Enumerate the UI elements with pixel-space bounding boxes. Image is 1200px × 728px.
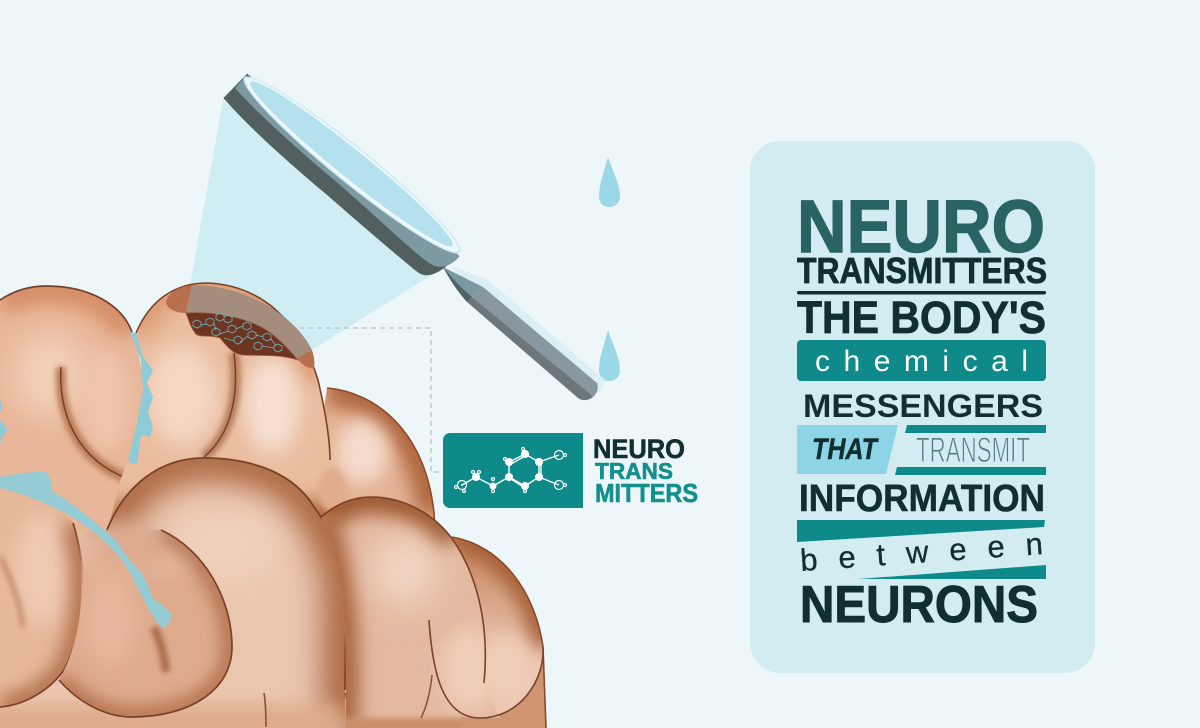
blue fluid band	[0, 471, 171, 627]
that block	[797, 425, 898, 474]
panel background	[750, 141, 1095, 673]
upper wedge	[797, 520, 1045, 542]
blue fluid drip between upper lobes	[0, 332, 153, 464]
lower middle lobe	[58, 529, 233, 718]
far right lobe	[452, 536, 547, 728]
lower wedge	[858, 565, 1046, 579]
translucent lens overlay	[186, 285, 312, 358]
dark tissue patch	[186, 313, 298, 360]
transmit block	[895, 425, 1046, 475]
panel: neurotransmitters definition	[750, 141, 1095, 673]
teal badge	[443, 433, 583, 508]
lower left lobe	[0, 511, 84, 708]
magnifying glass	[215, 62, 605, 400]
lens and rim	[215, 62, 473, 286]
logo wordmark: TRANS	[595, 458, 673, 484]
right middle lobe	[320, 490, 550, 728]
transmit block: TRANSMIT	[916, 431, 1030, 470]
text: the body's: THE BODY'S	[797, 292, 1046, 343]
orange tissue patches	[166, 285, 314, 368]
text: information: INFORMATION	[799, 478, 1045, 520]
rear right lobe	[324, 387, 436, 520]
chemical banner: chemical	[815, 345, 1028, 378]
molecule icon	[454, 448, 566, 492]
text: neurons: NEURONS	[800, 576, 1038, 634]
logo wordmark: NEURO	[593, 434, 685, 464]
handle glow	[450, 265, 605, 393]
handle	[443, 267, 598, 400]
molecule pattern	[193, 313, 282, 352]
divider rule	[797, 291, 1046, 294]
brain illustration	[0, 280, 550, 728]
water drops	[599, 157, 620, 381]
top middle lobe	[110, 282, 346, 520]
dashed connector line	[263, 328, 443, 472]
heading: neuro: NEURO	[797, 185, 1045, 268]
logo badge	[443, 433, 698, 508]
chemical banner	[797, 340, 1046, 381]
heading: transmitters: TRANSMITTERS	[797, 250, 1047, 291]
magnifier light beam	[185, 100, 430, 350]
text: between: between	[799, 526, 1044, 578]
central large lobe	[0, 450, 357, 728]
text: messengers: MESSENGERS	[803, 388, 1043, 424]
logo wordmark: MITTERS	[595, 478, 698, 508]
that block: THAT	[812, 433, 879, 466]
top left lobe	[0, 285, 143, 533]
logo wordmark	[593, 434, 698, 508]
magnified zone on brain	[166, 285, 314, 368]
